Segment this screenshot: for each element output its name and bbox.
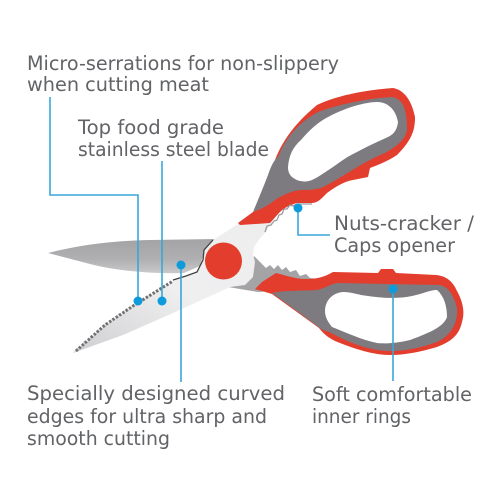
label: inner rings: inner rings — [312, 405, 411, 428]
lower handle — [255, 269, 463, 355]
label: stainless blade: Top food grade — [77, 116, 224, 139]
label: curved edges: edges for ultra sharp and — [27, 405, 267, 428]
upper blade — [48, 239, 218, 273]
upper handle grey grip — [253, 97, 407, 212]
callout dot: nuts-cracker — [294, 204, 302, 212]
label: curved edges: smooth cutting — [27, 427, 170, 450]
callout dot: micro-serrations — [134, 296, 142, 306]
label: curved edges: Specially designed curved — [27, 382, 285, 405]
label: nuts-cracker — [334, 212, 474, 257]
blade edge shadow — [173, 240, 213, 280]
cracker teeth — [265, 204, 312, 232]
lower finger hole — [325, 290, 447, 343]
lower right steel blade with teeth — [228, 256, 320, 292]
scissors illustration — [48, 88, 463, 355]
callout line: curved edges — [180, 265, 182, 382]
label: stainless blade: stainless steel blade — [78, 138, 269, 161]
label: stainless blade — [77, 116, 269, 161]
label: curved edges — [27, 382, 285, 450]
callout line: inner rings — [392, 289, 394, 381]
callout line: micro-serrations — [50, 97, 138, 301]
label: inner rings — [312, 383, 472, 428]
label: micro-serrations: when cutting meat — [27, 73, 209, 96]
upper finger hole — [288, 102, 398, 181]
lower handle grey grip — [272, 283, 457, 351]
callout dot: stainless blade — [158, 296, 166, 306]
upper handle — [238, 88, 415, 225]
callout line: nuts-cracker — [298, 208, 330, 235]
upper handle red shell — [238, 88, 415, 225]
label: micro-serrations — [27, 52, 339, 96]
label: nuts-cracker: Caps opener — [334, 234, 456, 257]
callout dot: inner rings — [388, 284, 398, 294]
pivot screw — [205, 242, 242, 280]
label: micro-serrations: Micro-serrations for non-slippery — [27, 52, 339, 75]
lower blade with serrated edge — [73, 222, 272, 353]
label: inner rings: Soft comfortable — [312, 383, 472, 406]
lower handle red shell — [255, 269, 463, 355]
callout dot: curved edges — [176, 260, 186, 270]
callout line: stainless blade — [161, 161, 163, 301]
label: nuts-cracker: Nuts-cracker / — [334, 212, 474, 235]
serration shading — [76, 281, 173, 351]
